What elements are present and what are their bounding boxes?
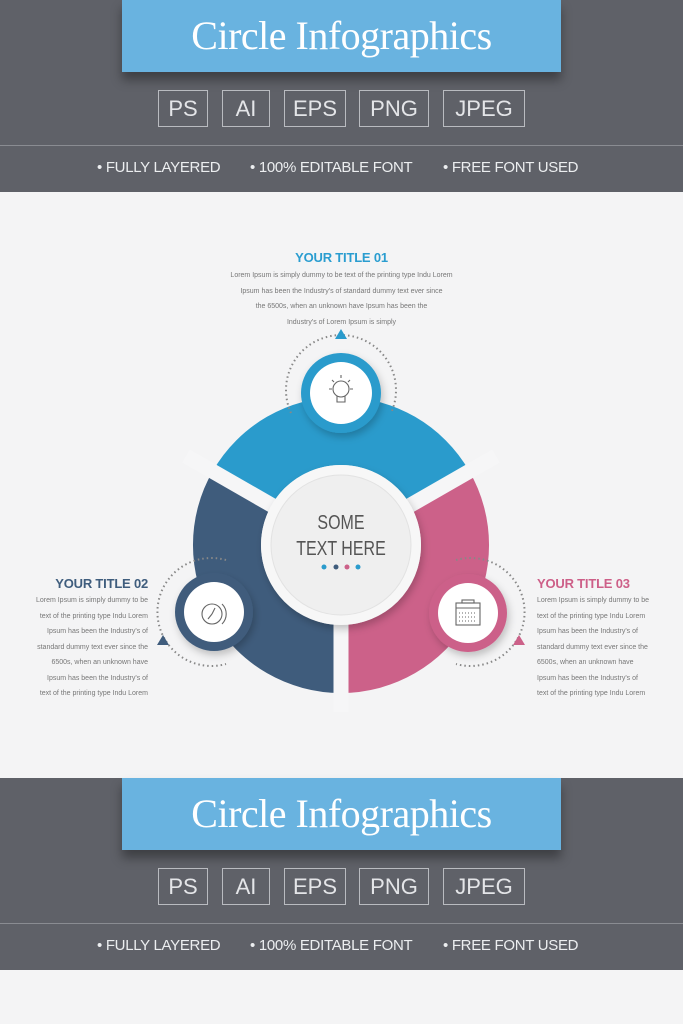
icon circle: left clock	[175, 573, 253, 651]
title 02 text block: 6500s, when an unknown have	[51, 659, 148, 666]
title 02 text block: Lorem Ipsum is simply dummy to be	[36, 597, 148, 604]
triangle markers	[157, 329, 525, 645]
format badges: PS	[168, 96, 198, 121]
title banner	[122, 0, 561, 72]
format badges: PS	[168, 874, 198, 899]
segment: top blue	[213, 397, 469, 505]
feature list: • FULLY LAYERED	[97, 937, 220, 954]
title 02 text block: YOUR TITLE 02	[55, 576, 148, 591]
title 01 text block: the 6500s, when an unknown have Ipsum has been the	[256, 303, 427, 310]
feature list	[97, 937, 578, 954]
format badges: EPS	[293, 874, 337, 899]
title banner	[122, 778, 561, 850]
title 02 text block: Ipsum has been the Industry's of	[47, 628, 148, 635]
bottom header band	[0, 778, 683, 970]
format badges: AI	[236, 874, 256, 899]
segment: left navy	[193, 471, 341, 693]
format badges	[158, 868, 525, 905]
title 03 text block: Ipsum has been the Industry's of	[537, 628, 638, 635]
format badges: JPEG	[455, 96, 513, 121]
title 03 text block: YOUR TITLE 03	[537, 576, 630, 591]
center circle: TEXT HERE	[296, 537, 386, 559]
title 03 text block: text of the printing type Indu Lorem	[537, 612, 645, 620]
feature list: • FREE FONT USED	[443, 159, 578, 176]
format badges: PNG	[370, 96, 418, 121]
feature list	[97, 159, 578, 176]
title banner: Circle Infographics	[191, 791, 492, 836]
title 03 text block: Ipsum has been the Industry's of	[537, 674, 638, 682]
white separators	[186, 456, 496, 712]
title 02 text block: standard dummy text ever since the	[37, 644, 148, 650]
top header band	[0, 0, 683, 192]
dotted arcs	[157, 335, 525, 666]
title 02 text block: Ipsum has been the Industry's of	[47, 674, 148, 682]
text: text of the printing type Indu Lorem	[40, 690, 148, 697]
format badges: EPS	[293, 96, 337, 121]
title 03 text block: Lorem Ipsum is simply dummy to be	[537, 597, 649, 604]
format badges: PNG	[370, 874, 418, 899]
title 02 text block: text of the printing type Indu Lorem	[40, 612, 148, 620]
title 01 text block	[230, 250, 453, 326]
center circle	[261, 465, 421, 625]
text: text of the printing type Indu Lorem	[537, 690, 645, 697]
title 01 text block: Ipsum has been the Industry's of standard dummy text ever since	[240, 288, 443, 294]
title 01 text block: Industry's of Lorem Ipsum is simply	[287, 318, 396, 326]
icon circle: top lightbulb	[301, 353, 381, 433]
format badges: AI	[236, 96, 256, 121]
title 03 text block: standard dummy text ever since the	[537, 644, 648, 650]
icon circle: right calendar	[429, 574, 507, 652]
feature list: • FULLY LAYERED	[97, 159, 220, 176]
title 01 text block: YOUR TITLE 01	[295, 250, 388, 265]
feature list: • FREE FONT USED	[443, 937, 578, 954]
feature list: • 100% EDITABLE FONT	[250, 159, 412, 176]
segment: right pink	[341, 471, 489, 693]
format badges	[158, 90, 525, 127]
title 03 text block	[537, 576, 649, 697]
format badges: JPEG	[455, 874, 513, 899]
title 03 text block: 6500s, when an unknown have	[537, 659, 634, 666]
title 02 text block	[36, 576, 148, 697]
feature list: • 100% EDITABLE FONT	[250, 937, 412, 954]
center circle: SOME	[317, 511, 365, 533]
title 01 text block: Lorem Ipsum is simply dummy to be text of the printing type Indu Lorem	[230, 272, 453, 279]
title banner: Circle Infographics	[191, 13, 492, 58]
